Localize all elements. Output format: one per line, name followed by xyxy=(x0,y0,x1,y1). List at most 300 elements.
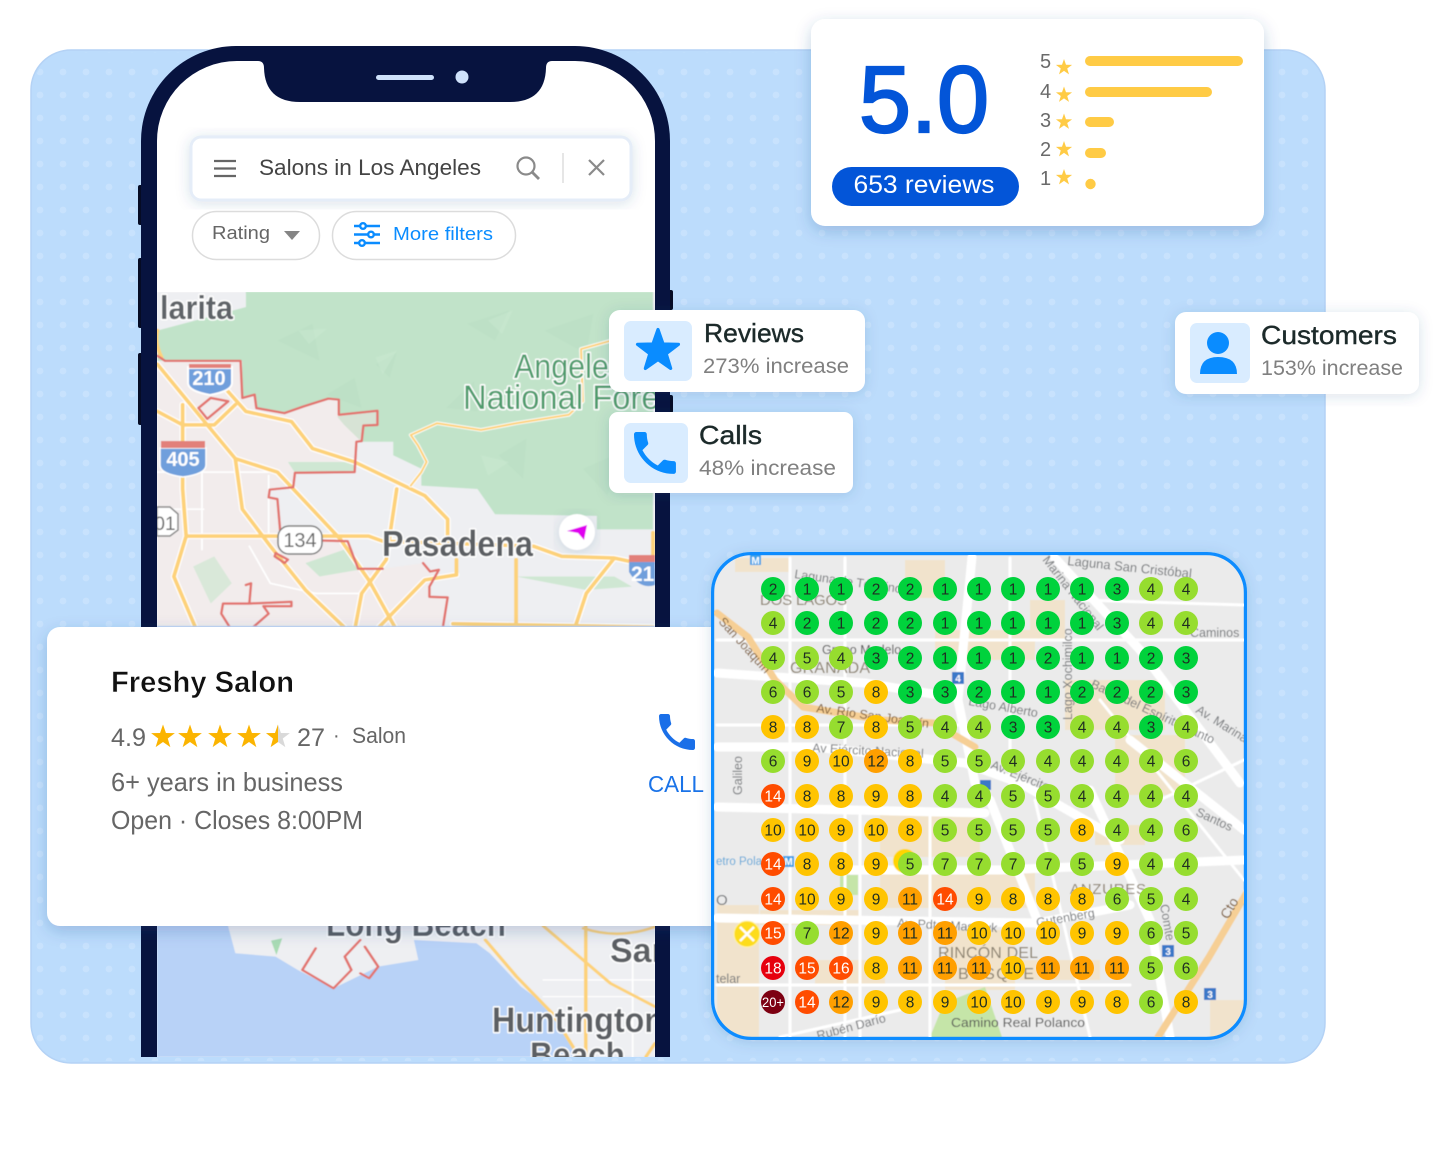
grid row 9: 5 xyxy=(906,856,914,874)
grid row 3: 1 xyxy=(1113,650,1121,668)
grid row 9 xyxy=(761,852,1198,876)
grid row 4: 1 xyxy=(1044,684,1052,702)
grid row 13: 9 xyxy=(1044,994,1052,1012)
grid row 3: 3 xyxy=(872,650,880,668)
rating row: Salon xyxy=(352,723,406,748)
map transit markers: 3 xyxy=(1207,990,1213,1001)
map labels: telar xyxy=(716,972,740,986)
rating row xyxy=(111,723,406,752)
grid row 1: 1 xyxy=(837,582,845,598)
map labels: Rubén Darío xyxy=(815,1011,887,1043)
grid row 3: 4 xyxy=(769,650,778,668)
grid row 12: 6 xyxy=(1182,960,1190,978)
grid row 1: 1 xyxy=(1078,582,1086,598)
grid row 5: 4 xyxy=(1113,720,1122,736)
icon: close xyxy=(589,160,604,175)
rating row: 4.9 xyxy=(111,724,146,752)
highway shield 210: 210 xyxy=(192,368,226,390)
grid row 10: 10 xyxy=(798,892,816,908)
grid row 3 xyxy=(761,646,1198,670)
grid row 2: 1 xyxy=(837,616,845,632)
grid row 11 xyxy=(761,921,1198,945)
map labels: Av. Marina xyxy=(1193,703,1251,746)
grid row 13: 8 xyxy=(906,994,914,1012)
grid row 8: 6 xyxy=(1182,822,1190,840)
highway shield 101: 01 xyxy=(154,514,176,535)
grid row 7: 8 xyxy=(837,788,845,806)
map labels: Comte xyxy=(1157,903,1177,942)
grid row 10: 8 xyxy=(1044,892,1052,908)
grid row 1: 2 xyxy=(769,582,777,598)
map labels: Laguna de Términos xyxy=(794,567,909,597)
icon: location arrow xyxy=(559,514,595,550)
grid row 2: 1 xyxy=(1078,616,1086,632)
grid row 9: 14 xyxy=(764,856,782,874)
grid row 10: 14 xyxy=(936,892,954,908)
map labels: Laguna San Cristóbal xyxy=(1067,553,1193,581)
map labels: RINCÓN DEL xyxy=(938,943,1038,962)
grid row 4: 6 xyxy=(769,684,777,702)
map labels: Grupo Modelo xyxy=(822,643,901,657)
grid row 12: 10 xyxy=(1004,960,1022,978)
map blocks xyxy=(717,558,1244,1037)
grid row 4: 1 xyxy=(1009,684,1017,702)
grid row 5: 5 xyxy=(906,720,914,736)
grid row 6: 5 xyxy=(975,754,983,770)
grid row 1: 1 xyxy=(1044,582,1052,598)
city boundaries xyxy=(157,356,448,630)
map transit markers: M xyxy=(784,857,793,868)
highway shield 101 xyxy=(154,507,178,536)
map transit markers: M xyxy=(751,556,760,567)
map labels: Cto xyxy=(1217,894,1242,922)
grid row 1: 3 xyxy=(1113,582,1121,598)
grid row 7: 14 xyxy=(764,788,782,806)
grid row 7: 8 xyxy=(906,788,914,806)
map labels: Av. Pdte. Masaryk xyxy=(897,916,998,935)
grid row 3: 4 xyxy=(837,650,846,668)
grid row 13: 9 xyxy=(941,994,949,1012)
grid row 5: 3 xyxy=(1044,720,1052,736)
grid row 13 xyxy=(761,990,1198,1014)
grid row 8: 10 xyxy=(867,822,885,840)
stat card: reviews: 273% increase xyxy=(703,355,849,378)
grid row 6: 6 xyxy=(1182,754,1190,770)
national forest xyxy=(157,292,653,529)
map label: Santa Clarita: larita xyxy=(160,289,234,326)
grid row 11: 7 xyxy=(803,926,811,942)
grid row 4: 2 xyxy=(1113,684,1121,702)
grid row 1: 1 xyxy=(1009,582,1017,598)
grid row 6: 4 xyxy=(1044,754,1053,770)
grid row 7: 4 xyxy=(975,788,984,806)
city area xyxy=(244,396,361,441)
grid row 3: 3 xyxy=(1182,650,1190,668)
upper map features xyxy=(157,292,653,630)
stat card: customers: Customers xyxy=(1261,320,1397,350)
grid row 8: 4 xyxy=(1147,822,1156,840)
grid row 2: 4 xyxy=(1147,616,1156,632)
map label: Long Beach: Long Beach xyxy=(326,905,506,944)
phone speaker and camera xyxy=(376,70,468,84)
grid row 1: 4 xyxy=(1182,582,1191,598)
grid row 7: 4 xyxy=(1182,788,1191,806)
grid row 10: 4 xyxy=(1182,892,1191,908)
grid row 3: 1 xyxy=(975,650,983,668)
map label: Huntington Beach xyxy=(492,1005,655,1057)
map labels: ANZURES xyxy=(1070,881,1146,898)
grid row 1: 4 xyxy=(1147,582,1156,598)
filter chip: rating xyxy=(192,212,320,260)
grid row 2: 1 xyxy=(1044,616,1052,632)
grid row 10: 14 xyxy=(764,892,782,908)
grid row 13: 8 xyxy=(1113,994,1121,1012)
grid row 13: 14 xyxy=(798,994,816,1012)
icon: search xyxy=(518,158,539,179)
grid row 12: 8 xyxy=(872,960,880,978)
grid row 8: 4 xyxy=(1113,822,1122,840)
grid row 9: 7 xyxy=(941,856,949,874)
grid row 3: 1 xyxy=(941,650,949,668)
grid row 6: 4 xyxy=(1009,754,1018,770)
grid row 12: 11 xyxy=(937,960,953,978)
google map on phone xyxy=(154,289,686,1075)
icon: menu xyxy=(214,161,236,176)
grid row 4: 8 xyxy=(872,684,880,702)
map labels: BOSQUE xyxy=(958,966,1034,983)
map labels: San Joaquín xyxy=(716,615,773,676)
grid row 4: 2 xyxy=(975,684,983,702)
grid row 9: 9 xyxy=(872,856,880,874)
grid row 10: 8 xyxy=(1078,892,1086,908)
grid row 9: 5 xyxy=(1078,856,1086,874)
icon: phone xyxy=(634,432,676,474)
grid row 5: 3 xyxy=(1009,720,1017,736)
grid row 2: 2 xyxy=(906,616,914,632)
restaurant marker xyxy=(734,921,760,947)
grid row 9: 4 xyxy=(1182,856,1191,874)
grid row 2: 2 xyxy=(872,616,880,632)
grid row 5 xyxy=(761,715,1198,739)
grid row 4: 3 xyxy=(941,684,949,702)
grid row 12: 5 xyxy=(1147,960,1155,978)
grid row 13: 9 xyxy=(1078,994,1086,1012)
grid row 10: 8 xyxy=(1009,892,1017,908)
minor streets xyxy=(157,471,517,594)
grid row 12: 11 xyxy=(1040,960,1056,978)
map label: Pasadena: Pasadena xyxy=(382,523,534,564)
grid row 11: 6 xyxy=(1147,926,1155,942)
grid row 10: 5 xyxy=(1147,892,1155,908)
grid row 4: 2 xyxy=(1147,684,1155,702)
highway shield 21: 21 xyxy=(631,563,655,586)
icon: call phone xyxy=(659,714,695,750)
map park xyxy=(930,987,1002,1037)
grid row 13: 8 xyxy=(1182,994,1190,1012)
grid row 13: 10 xyxy=(970,994,988,1012)
grid row 10: 11 xyxy=(902,892,918,908)
grid row 10: 9 xyxy=(837,892,845,908)
business name: Freshy Salon xyxy=(111,666,294,699)
grid row 9: 4 xyxy=(1147,856,1156,874)
grid row 7: 5 xyxy=(1044,788,1052,806)
map label: Angeles National Forest: Angeles xyxy=(514,348,624,386)
grid row 3: 2 xyxy=(1147,650,1155,668)
grid row 7: 4 xyxy=(1113,788,1122,806)
grid row 8: 8 xyxy=(1078,822,1086,840)
opening hours: Open · Closes 8:00PM xyxy=(111,805,363,835)
grid row 12: 11 xyxy=(1074,960,1090,978)
grid row 1: 1 xyxy=(941,582,949,598)
rating distribution bars xyxy=(1085,56,1243,189)
grid row 13: 9 xyxy=(872,994,880,1012)
map labels: Caminos xyxy=(1190,626,1239,640)
map label: Huntington Beach: Huntington xyxy=(492,1001,664,1040)
grid row 1 xyxy=(761,577,1198,601)
grid row 10 xyxy=(761,887,1198,911)
map labels: Lago Xochimilco xyxy=(1061,628,1075,720)
grid row 11: 9 xyxy=(1113,926,1121,942)
review count pill: 653 reviews xyxy=(854,171,994,199)
highways xyxy=(157,331,653,630)
grid row 13: 12 xyxy=(832,994,850,1012)
grid row 2 xyxy=(761,611,1198,635)
stat card: calls: 48% increase xyxy=(699,457,836,480)
grid row 11: 11 xyxy=(902,926,918,942)
map label: Huntington Beach: Beach xyxy=(530,1036,625,1075)
grid row 11: 15 xyxy=(764,926,782,942)
grid row 6: 6 xyxy=(769,754,777,770)
business listing card xyxy=(47,627,737,926)
stat card: customers: 153% increase xyxy=(1261,357,1403,380)
grid row 5: 8 xyxy=(872,720,880,736)
search query text: Salons in Los Angeles xyxy=(259,155,481,180)
filter chip: rating: Rating xyxy=(212,222,270,243)
filter chip: more filters xyxy=(332,212,516,260)
phone mockup xyxy=(138,46,686,1075)
orange avenues xyxy=(717,613,1250,1037)
rating labels: 5 xyxy=(1040,51,1051,73)
grid row 1: 2 xyxy=(906,582,914,598)
grid row 1: 1 xyxy=(803,582,811,598)
grid row 8: 5 xyxy=(941,822,949,840)
grid row 2: 1 xyxy=(941,616,949,632)
grid row 6: 12 xyxy=(867,754,885,770)
grid row 7: 8 xyxy=(803,788,811,806)
rating labels: 2 xyxy=(1040,139,1051,161)
icon: sliders xyxy=(354,223,380,246)
major roads xyxy=(717,557,1244,1037)
grid row 12: 15 xyxy=(798,960,816,978)
icon: star xyxy=(638,330,678,368)
grid row 6: 4 xyxy=(1147,754,1156,770)
grid row 1: 1 xyxy=(975,582,983,598)
grid row 5: 8 xyxy=(803,720,811,736)
grid row 7: 5 xyxy=(1009,788,1017,806)
grid row 4: 2 xyxy=(1078,684,1086,702)
grid row 5: 4 xyxy=(1078,720,1087,736)
rating row: · xyxy=(333,725,340,747)
grid row 11: 9 xyxy=(1078,926,1086,942)
map labels: Bahía del Espíritu Santo xyxy=(1089,677,1217,747)
grid row 11: 10 xyxy=(970,926,988,942)
map labels: Marina Nacional xyxy=(1040,553,1106,633)
grid row 11: 11 xyxy=(937,926,953,942)
map transit markers: 3 xyxy=(1165,947,1171,958)
map labels: etro Polanco xyxy=(716,856,781,868)
grid row 12: 18 xyxy=(764,960,782,978)
grid row 8: 5 xyxy=(1009,822,1017,840)
grid row 2: 1 xyxy=(975,616,983,632)
grid row 5: 8 xyxy=(769,720,777,736)
grid row 2: 1 xyxy=(1009,616,1017,632)
background panel xyxy=(31,50,1325,1063)
grid row 12: 16 xyxy=(832,960,850,978)
map labels: GRANADA xyxy=(790,660,870,677)
grid row 5: 4 xyxy=(941,720,950,736)
grid row 6: 10 xyxy=(832,754,850,770)
map labels: Av. Ejército xyxy=(989,758,1052,794)
mountain road xyxy=(411,341,611,486)
review count pill xyxy=(832,167,1019,206)
grid row 9: 9 xyxy=(1113,856,1121,874)
grid row 5: 3 xyxy=(1147,720,1155,736)
filter chip: more filters: More filters xyxy=(393,224,493,244)
highway shield 134 xyxy=(278,526,322,554)
average rating: 5.0 xyxy=(859,47,989,153)
grid row 12: 11 xyxy=(971,960,987,978)
grid row 4: 6 xyxy=(803,684,811,702)
grid row 2: 2 xyxy=(803,616,811,632)
grid row 7 xyxy=(761,784,1198,808)
grid row 8: 5 xyxy=(1044,822,1052,840)
grid row 13: 10 xyxy=(1004,994,1022,1012)
map labels: Santos xyxy=(1194,805,1235,834)
stat card: calls: Calls xyxy=(699,420,762,450)
highway shield 134: 134 xyxy=(283,530,317,552)
grid row 8: 10 xyxy=(798,822,816,840)
map labels: Av. Río San Joaquín xyxy=(816,701,930,731)
grid row 2: 4 xyxy=(769,616,778,632)
grid row 5: 4 xyxy=(975,720,984,736)
grid row 3: 2 xyxy=(1044,650,1052,668)
grid row 12: 11 xyxy=(1109,960,1125,978)
years in business: 6+ years in business xyxy=(111,767,343,797)
map transit markers xyxy=(750,555,1216,1001)
rating label stars xyxy=(1056,59,1072,184)
grid row 5: 7 xyxy=(837,720,845,736)
map label: Santa Ana: San xyxy=(610,932,672,970)
grid row 12: 11 xyxy=(902,960,918,978)
grid row 6: 4 xyxy=(1078,754,1087,770)
grid row 10: 6 xyxy=(1113,892,1121,908)
grid row 10: 9 xyxy=(975,892,983,908)
rating summary card xyxy=(811,19,1264,226)
map labels: Lago Alberto xyxy=(967,694,1039,720)
rank grid xyxy=(761,577,1198,1014)
grid row 11: 10 xyxy=(1039,926,1057,942)
map labels xyxy=(716,553,1251,1043)
map labels: Galileo xyxy=(731,756,745,795)
grid row 3: 1 xyxy=(1078,650,1086,668)
grid row 9: 7 xyxy=(975,856,983,874)
map labels: Gutenberg xyxy=(1035,906,1096,930)
highway shield 405 xyxy=(160,441,206,477)
grid row 13: 6 xyxy=(1147,994,1155,1012)
grid row 10: 9 xyxy=(872,892,880,908)
grid row 7: 9 xyxy=(872,788,880,806)
grid row 11: 5 xyxy=(1182,926,1190,942)
lower map xyxy=(157,626,655,1057)
grid row 2: 4 xyxy=(1182,616,1191,632)
grid row 8: 8 xyxy=(906,822,914,840)
stat card: calls xyxy=(609,412,853,493)
grid row 6: 5 xyxy=(941,754,949,770)
grid row 7: 4 xyxy=(941,788,950,806)
rating labels: 4 xyxy=(1040,81,1051,103)
search bar xyxy=(191,137,631,200)
grid row 9: 7 xyxy=(1009,856,1017,874)
map labels: Av Ejército Nacional xyxy=(812,741,924,761)
stat card: reviews: Reviews xyxy=(704,318,804,348)
map label: Angeles National Forest: National Forest xyxy=(463,379,686,417)
grid row 4 xyxy=(761,680,1198,704)
icon: person xyxy=(1200,332,1237,374)
grid row 8: 5 xyxy=(975,822,983,840)
phone side buttons xyxy=(138,185,673,425)
phone screen xyxy=(157,61,655,1057)
grid row 2: 3 xyxy=(1113,616,1121,632)
grid row 4: 3 xyxy=(906,684,914,702)
grid row 6: 9 xyxy=(803,754,811,770)
road casing xyxy=(157,364,653,630)
grid row 7: 4 xyxy=(1078,788,1087,806)
grid row 8: 9 xyxy=(837,822,845,840)
grid row 4: 5 xyxy=(837,684,845,702)
grid row 4: 3 xyxy=(1182,684,1190,702)
grid row 6: 8 xyxy=(906,754,914,770)
grid row 11: 9 xyxy=(872,926,880,942)
grid row 11: 12 xyxy=(832,926,850,942)
highway shield 21 xyxy=(629,555,655,586)
grid row 13: 20+ xyxy=(762,995,784,1010)
grid row 5: 4 xyxy=(1182,720,1191,736)
highway shield 405: 405 xyxy=(166,449,200,471)
map labels: Camino Real Polanco xyxy=(951,1015,1085,1030)
highway shield 210 xyxy=(187,364,233,396)
map streets xyxy=(717,558,1244,1037)
map labels: O xyxy=(716,892,728,909)
rating labels: 1 xyxy=(1040,168,1051,190)
grid row 3: 1 xyxy=(1009,650,1017,668)
grid row 6: 4 xyxy=(1113,754,1122,770)
grid row 12 xyxy=(761,956,1198,980)
phone frame xyxy=(141,46,670,1057)
grid row 3: 2 xyxy=(906,650,914,668)
stat card: customers xyxy=(1175,312,1419,394)
grid row 1: 2 xyxy=(872,582,880,598)
rank grid map card xyxy=(711,552,1251,1043)
call label: CALL xyxy=(648,771,704,797)
stat card: reviews xyxy=(609,310,865,392)
rating stars xyxy=(151,724,290,747)
grid row 9: 8 xyxy=(837,856,845,874)
grid row 7: 4 xyxy=(1147,788,1156,806)
grid row 11: 10 xyxy=(1004,926,1022,942)
rating labels xyxy=(1040,51,1051,190)
grid row 8: 10 xyxy=(764,822,782,840)
grid row 3: 5 xyxy=(803,650,811,668)
